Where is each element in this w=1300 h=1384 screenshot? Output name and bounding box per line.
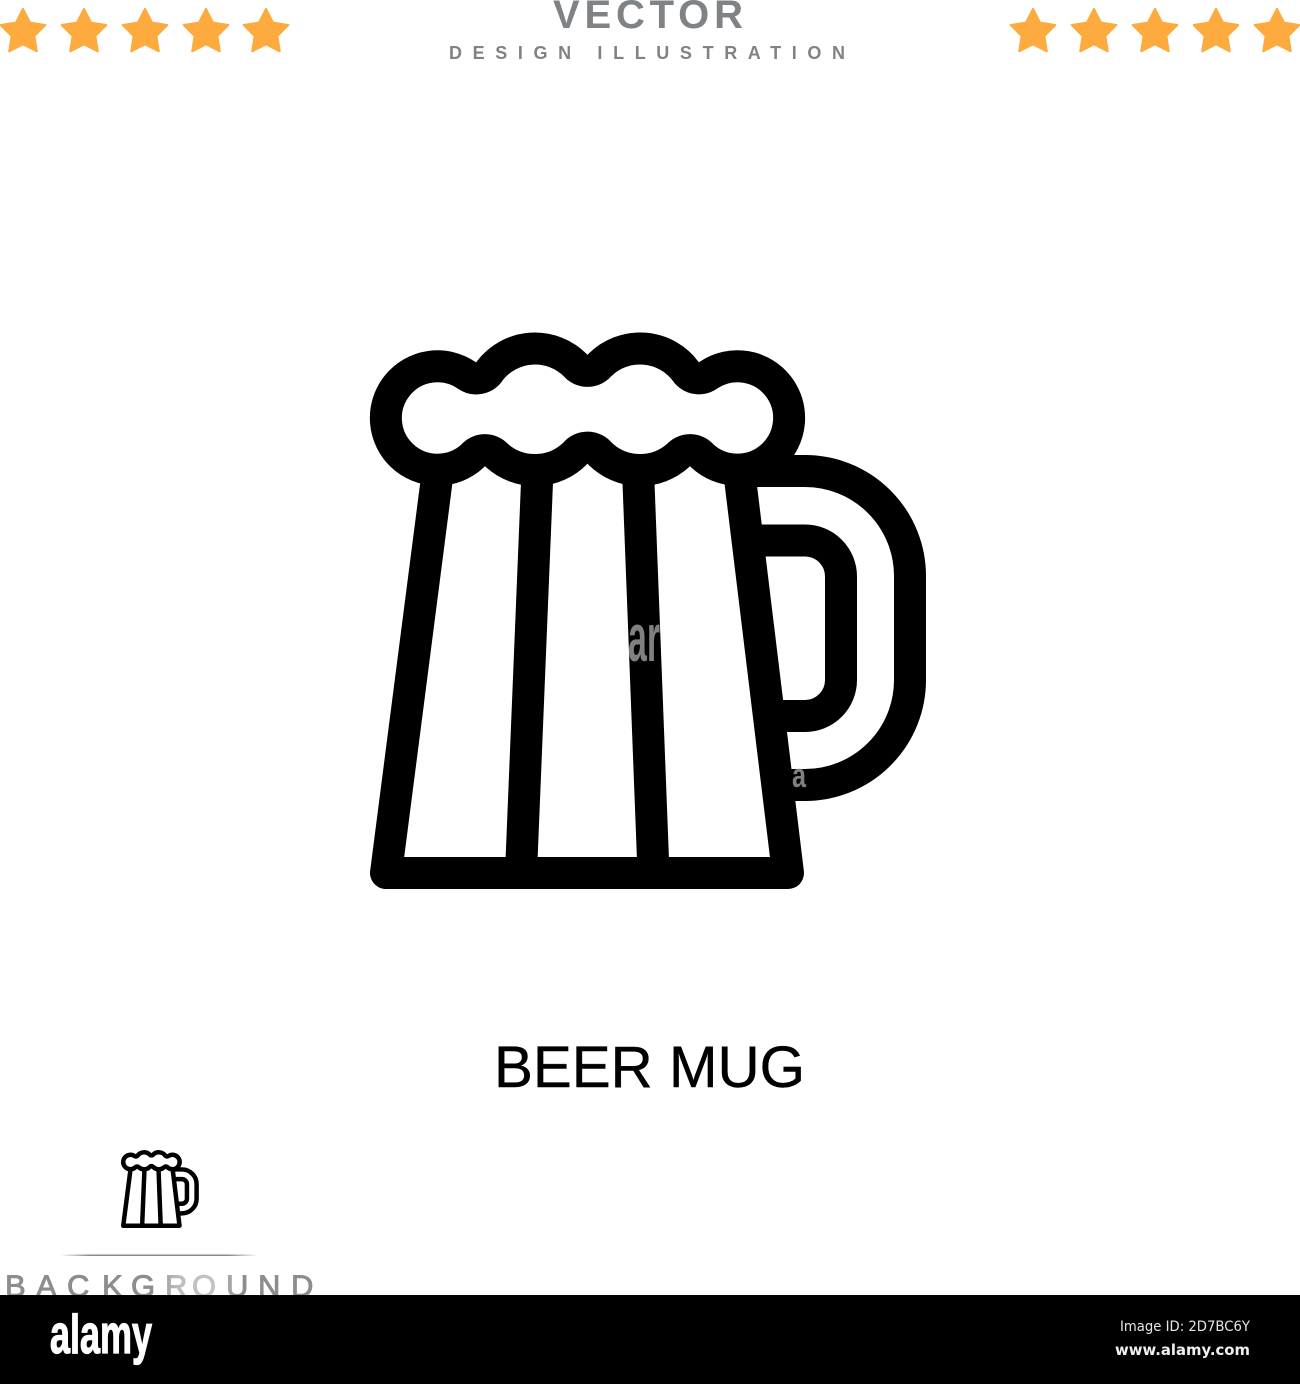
watermark fragment on mug handle: a	[792, 757, 807, 795]
mug foam	[386, 348, 789, 470]
stars: top left rating	[1, 9, 288, 51]
logo: alamy: alamy	[50, 1303, 152, 1365]
mug left rib	[521, 470, 538, 873]
image id: Image ID: 2D7BC6Y	[1120, 1319, 1250, 1335]
mug handle inner	[755, 540, 841, 716]
mug body	[386, 470, 788, 873]
stars: top right rating	[1011, 9, 1299, 51]
label: BACKGROUND: BACKGROUND	[5, 1268, 313, 1304]
subheading: DESIGN ILLUSTRATION: DESIGN ILLUSTRATION	[449, 43, 845, 63]
text: ar	[628, 600, 660, 676]
title: BEER MUG: BEER MUG	[494, 1035, 805, 1100]
mug right rib	[638, 470, 654, 873]
divider line above BACKGROUND	[60, 1254, 258, 1256]
icon: small beer mug	[123, 1152, 197, 1226]
footer bar	[0, 1295, 1300, 1384]
icon: large beer mug	[386, 348, 910, 873]
mug handle outer	[745, 471, 910, 785]
website: www.alamy.com	[1115, 1341, 1250, 1359]
